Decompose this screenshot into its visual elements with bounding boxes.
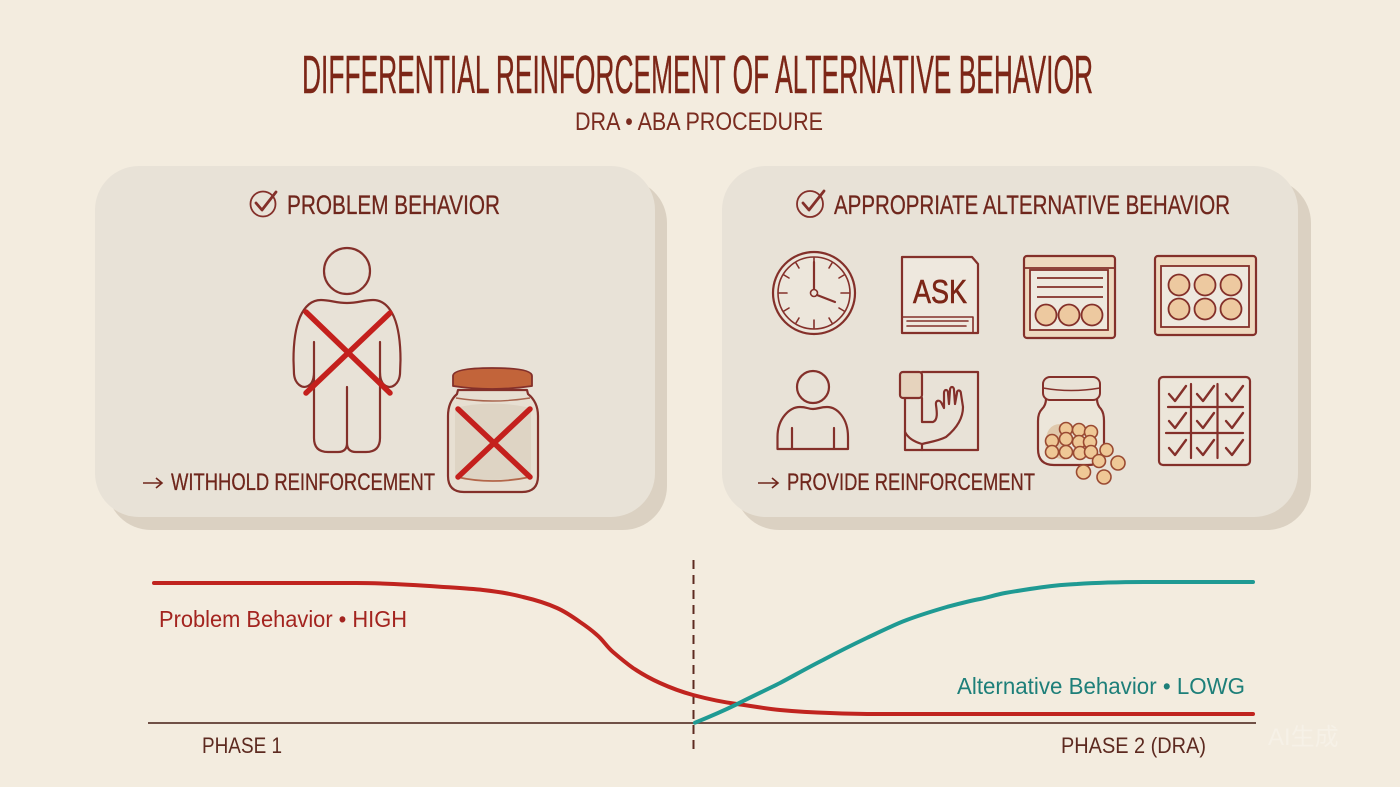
label: alternative behavior low: Alternative Behavior • LOWG [957, 673, 1245, 699]
icon: raised hand [900, 372, 978, 450]
icon: check circle right [797, 191, 824, 217]
label: problem behavior high: Problem Behavior • HIGH [159, 606, 407, 632]
panel shadow right [735, 179, 1311, 530]
icon: ask card: ASK [913, 273, 967, 310]
icon: check circle left [250, 192, 276, 216]
panel card left [95, 166, 655, 517]
phase divider [692, 560, 694, 752]
problem behavior curve [154, 583, 1253, 714]
panel card right [722, 166, 1298, 517]
icon: token board [1155, 256, 1256, 335]
panel: problem behavior [95, 166, 667, 530]
panel shadow left [107, 179, 667, 530]
icon: jar of tokens [1038, 377, 1125, 484]
label: phase 1: PHASE 1 [202, 733, 282, 758]
icon: clock [773, 252, 855, 334]
label: phase 2: PHASE 2 (DRA) [1061, 733, 1206, 758]
watermark: AI生成 [1268, 724, 1339, 751]
x axis [148, 722, 1256, 724]
subtitle: DRA • ABA PROCEDURE [575, 108, 823, 136]
icon: crossed-out person [294, 248, 400, 452]
heading: appropriate alternative behavior: APPROPRIATE ALTERNATIVE BEHAVIOR [834, 190, 1230, 220]
heading: problem behavior: PROBLEM BEHAVIOR [287, 190, 500, 220]
icon: crossed-out empty jar [448, 368, 538, 492]
panel: appropriate alternative behavior [722, 166, 1311, 530]
line chart [148, 560, 1256, 758]
icon: ask card [902, 257, 978, 333]
text: withhold reinforcement: WITHHOLD REINFORCEMENT [171, 469, 435, 496]
text: provide reinforcement: PROVIDE REINFORCEMENT [787, 469, 1035, 496]
icon: checklist grid [1159, 377, 1250, 465]
alternative behavior curve [695, 582, 1253, 723]
icon: person [778, 371, 848, 449]
icon: schedule board with lines [1024, 256, 1115, 338]
